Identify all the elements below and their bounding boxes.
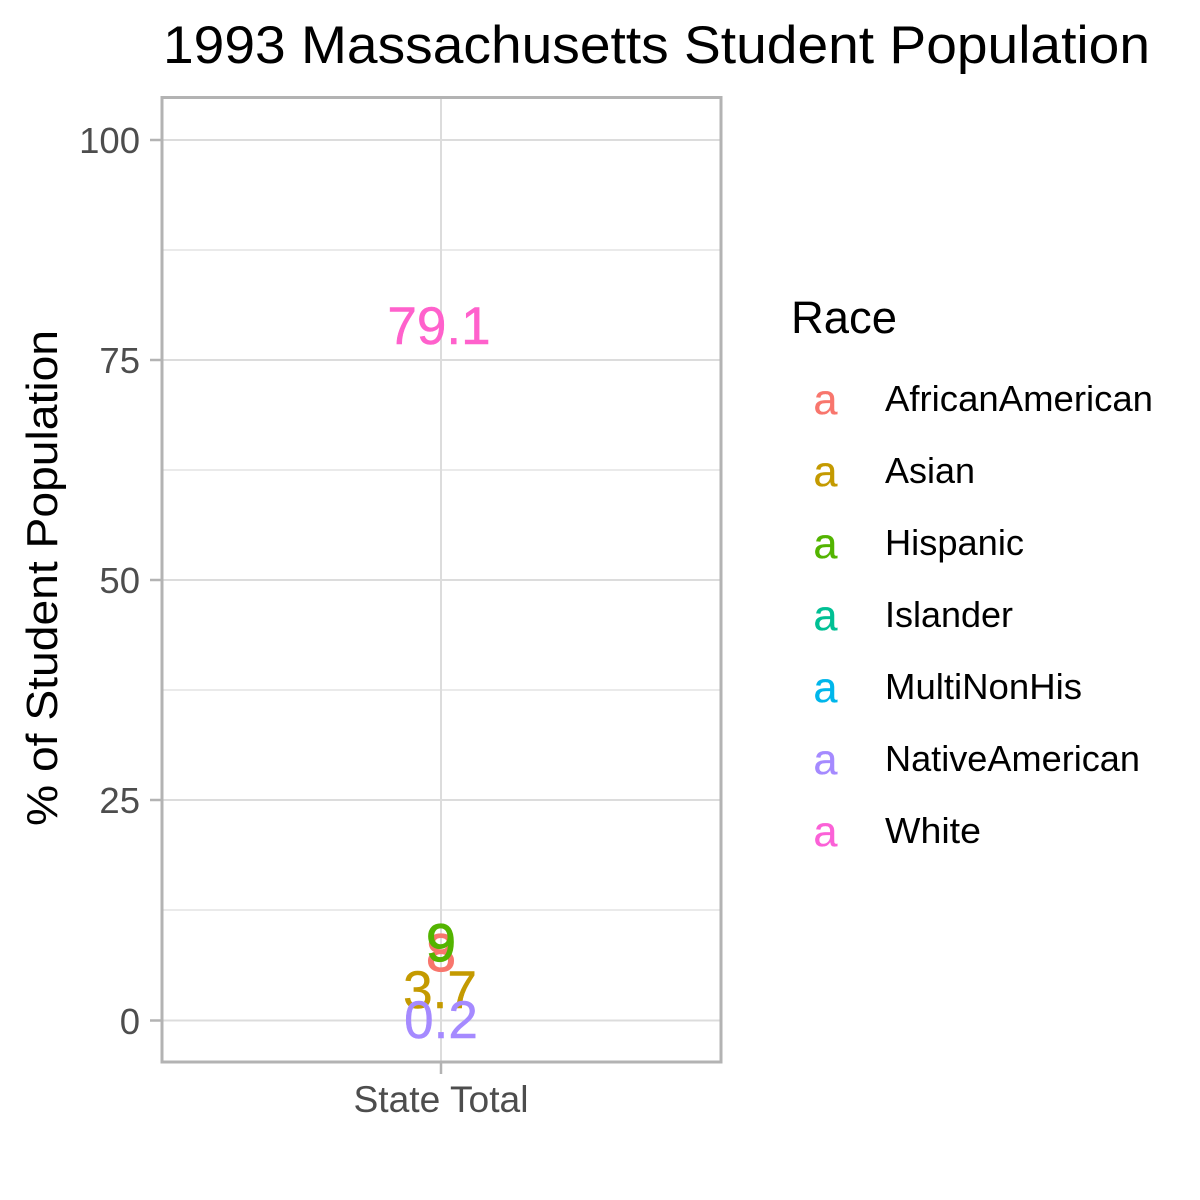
legend keys: a — [814, 808, 838, 856]
title: 1993 Massachusetts Student Population — [163, 16, 1150, 75]
data labels: 79.1 — [387, 297, 491, 356]
legend labels: MultiNonHis — [885, 666, 1082, 707]
legend labels: AfricanAmerican — [885, 378, 1153, 419]
legend title: Race — [791, 292, 897, 343]
legend keys: a — [814, 448, 838, 496]
legend keys: a — [814, 376, 838, 424]
data labels — [387, 297, 491, 1050]
legend keys — [814, 376, 838, 856]
data labels: 3.7 — [403, 961, 477, 1020]
y axis title: % of Student Population — [18, 330, 67, 826]
legend labels: Asian — [885, 450, 975, 491]
legend labels: Islander — [885, 594, 1013, 635]
legend keys: a — [814, 592, 838, 640]
y axis ticks — [150, 140, 441, 1074]
x axis label: State Total — [354, 1079, 528, 1120]
data labels: 9 — [426, 914, 456, 973]
y axis labels: 25 — [99, 780, 140, 821]
legend labels: White — [885, 810, 981, 851]
y axis labels: 0 — [120, 1001, 140, 1042]
legend labels: Hispanic — [885, 522, 1024, 563]
legend labels — [885, 378, 1153, 851]
data labels: 8 — [426, 924, 456, 983]
data labels: 0.2 — [404, 991, 478, 1050]
legend labels: NativeAmerican — [885, 738, 1140, 779]
legend keys: a — [814, 664, 838, 712]
legend — [791, 292, 1153, 856]
y axis labels: 50 — [99, 560, 140, 601]
chart panel — [150, 97, 721, 1074]
legend keys: a — [814, 736, 838, 784]
y axis labels: 100 — [79, 120, 140, 161]
y axis labels: 75 — [99, 340, 140, 381]
legend keys: a — [814, 520, 838, 568]
y axis labels — [79, 120, 140, 1042]
